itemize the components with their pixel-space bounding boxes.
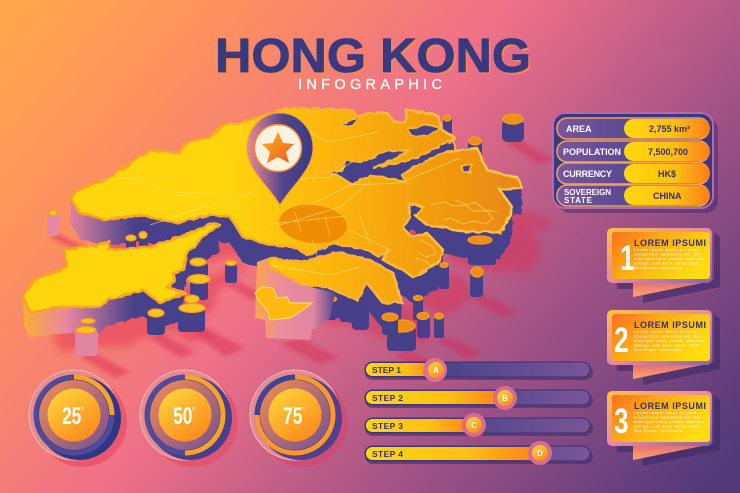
step slider 3: C xyxy=(471,421,477,430)
card 3 xyxy=(607,391,720,466)
map shadow xyxy=(53,148,552,352)
icon: star xyxy=(262,132,294,163)
card 1: consectetur adipiscing elit. Sin xyxy=(634,252,700,256)
district lines xyxy=(100,120,460,275)
gauge 75 xyxy=(250,370,348,467)
row: area xyxy=(557,118,710,139)
step slider 4: STEP 4 xyxy=(372,449,403,459)
pin face xyxy=(254,124,302,172)
card 2: consectetur adipiscing elit. Sin xyxy=(634,334,700,338)
title: HONG KONG xyxy=(217,32,533,85)
row: sovereign state xyxy=(557,185,710,206)
subtitle: INFOGRAPHIC xyxy=(298,77,442,93)
card 3: 3 xyxy=(614,401,629,441)
row: sovereign state: STATE xyxy=(564,196,593,205)
step slider 2: STEP 2 xyxy=(372,393,403,403)
Lamma island xyxy=(255,258,335,340)
card 2 xyxy=(607,310,720,385)
row: currency xyxy=(557,163,710,184)
card 2: Lorem ipsum dolor sit amet, xyxy=(634,330,700,334)
row: sovereign state: CHINA xyxy=(653,191,682,201)
step slider 4 xyxy=(365,441,593,465)
gauge 50: ° xyxy=(192,405,195,415)
step slider 1 xyxy=(365,358,593,382)
row: population: POPULATION xyxy=(563,147,621,157)
map of Hong Kong xyxy=(23,108,555,378)
gauge 25: ° xyxy=(81,405,84,415)
row: population xyxy=(557,141,710,162)
inlets xyxy=(320,140,455,185)
panel: facts table xyxy=(553,113,718,213)
card 3: Duo Reges: constructio xyxy=(634,429,682,433)
gauge 50: 50 xyxy=(173,403,192,430)
gauge 75: 75 xyxy=(283,403,302,430)
step slider 1: STEP 1 xyxy=(372,365,401,375)
row: currency: CURRENCY xyxy=(563,169,612,179)
row: population: 7,500,700 xyxy=(648,147,688,157)
card 3: LOREM IPSUMI xyxy=(634,401,706,411)
card 2: aliud quid voles, postea. Nam iure xyxy=(634,339,704,343)
islands xyxy=(47,114,555,378)
step slider 2: B xyxy=(502,394,508,403)
card 2: LOREM IPSUMI xyxy=(634,320,706,330)
island shadows xyxy=(50,138,555,378)
card 3: aliud quid voles, postea. Nam iure xyxy=(634,420,704,424)
card 3: consectetur adipiscing elit. Sin xyxy=(634,416,700,420)
row: area: AREA xyxy=(566,124,592,134)
Kowloon highlight xyxy=(277,202,349,246)
step slider 4: D xyxy=(537,449,543,458)
step slider 2 xyxy=(365,386,593,410)
gauge 25 xyxy=(29,370,127,467)
map pin xyxy=(247,113,313,205)
card 3: Lorem ipsum dolor sit amet, xyxy=(634,411,700,415)
card 1: Lorem ipsum dolor sit amet, xyxy=(634,248,700,252)
step slider 3: STEP 3 xyxy=(372,421,403,431)
Sai Kung contours xyxy=(415,200,497,267)
row: currency: HK$ xyxy=(658,169,676,179)
card 1: Duo Reges: constructio xyxy=(634,266,682,270)
card 1 xyxy=(607,228,720,303)
card 2: 2 xyxy=(614,320,629,360)
card 2: adesse, cum dolor omnis absit. xyxy=(634,344,700,348)
gauge 25: 25 xyxy=(62,403,81,430)
card 1: adesse, cum dolor omnis absit. xyxy=(634,262,700,266)
card 2: Duo Reges: constructio xyxy=(634,348,682,352)
step slider 3 xyxy=(365,413,593,437)
card 1: aliud quid voles, postea. Nam iure xyxy=(634,257,704,261)
card 1: 1 xyxy=(620,238,635,278)
row: area: 2,755 km² xyxy=(649,124,690,134)
row: sovereign state: SOVEREIGN xyxy=(564,188,611,197)
map extrusion xyxy=(23,110,522,338)
gauge 75: ° xyxy=(302,405,305,415)
title: HONG KONG xyxy=(215,30,531,83)
gauge 50 xyxy=(140,370,238,467)
card 1: LOREM IPSUMI xyxy=(634,238,706,248)
map top surface xyxy=(23,108,522,312)
step slider 1: A xyxy=(433,366,439,375)
card 3: adesse, cum dolor omnis absit. xyxy=(634,424,700,428)
